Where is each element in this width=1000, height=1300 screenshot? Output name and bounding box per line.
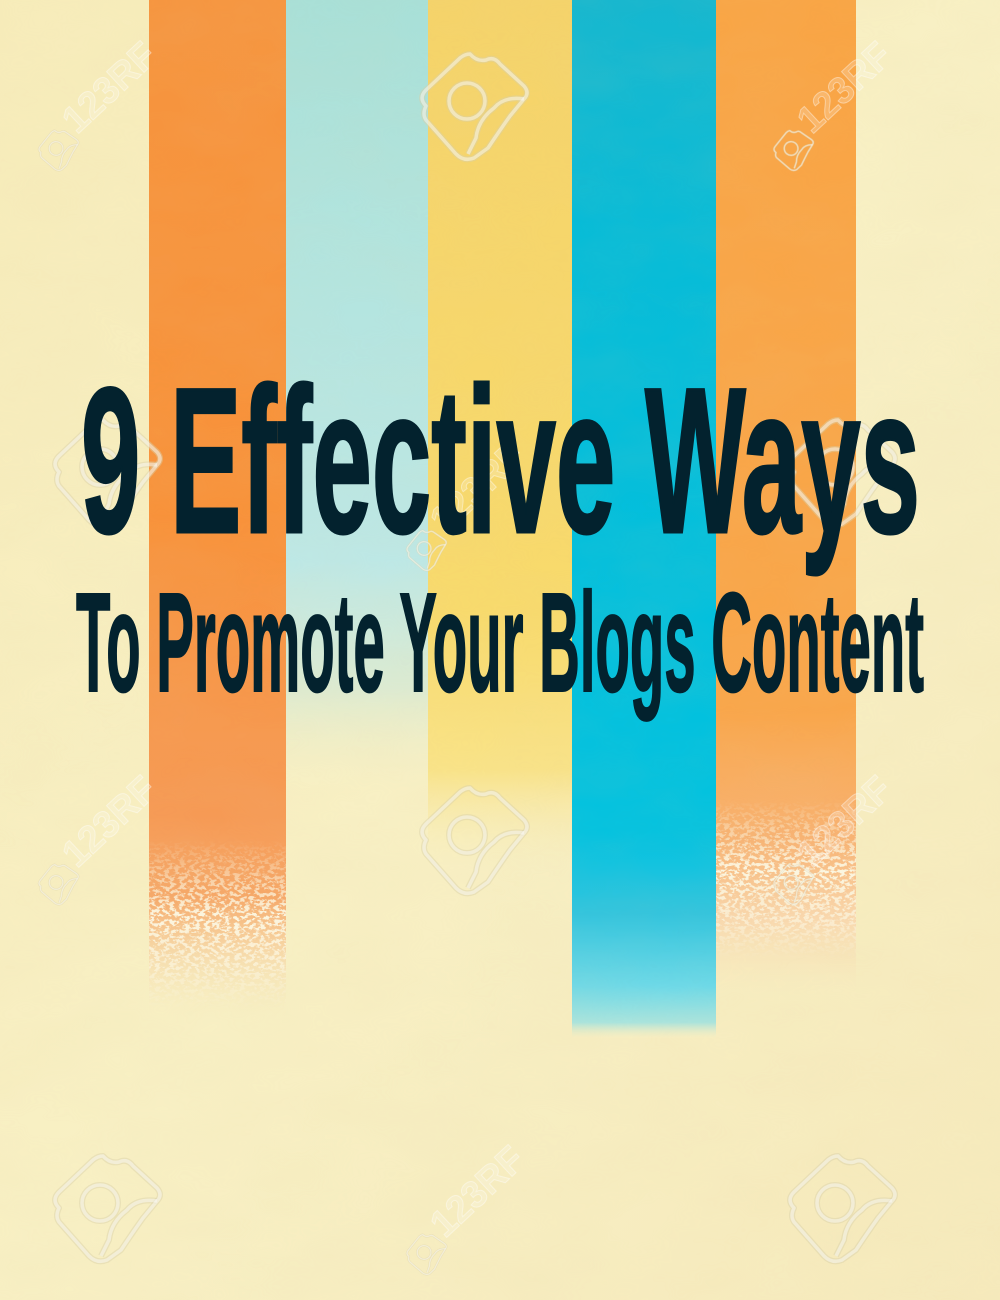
watermark: top left <box>37 34 165 173</box>
stripe: orange right <box>716 0 856 1010</box>
stripe: cyan <box>572 0 716 1038</box>
stripe: yellow <box>428 0 572 875</box>
watermark: lower left: 123RF <box>54 768 165 876</box>
speckled fade: left orange stripe <box>149 845 286 994</box>
watermark: top centre stamp <box>422 54 527 159</box>
watermark: lower left <box>37 768 165 907</box>
watermark: lower right <box>772 768 900 907</box>
stripe: orange left <box>149 0 286 1020</box>
watermark: lower right: 123RF <box>789 768 900 876</box>
watermark: top right: 123RF <box>789 34 900 142</box>
watermark: middle right stamp <box>790 420 895 525</box>
watermark: bottom centre <box>405 1138 533 1277</box>
stripe: pale aqua <box>286 0 428 800</box>
watermark: middle centre <box>405 434 533 573</box>
watermark: bottom right stamp <box>790 1156 895 1261</box>
watermark: middle left stamp <box>55 420 160 525</box>
watermark: bottom left stamp <box>55 1156 160 1261</box>
watermark: top right <box>772 34 900 173</box>
watermark: lower centre stamp <box>422 788 527 893</box>
watermark: bottom centre: 123RF <box>422 1138 533 1246</box>
watermark: top left: 123RF <box>54 34 165 142</box>
speckled fade: right orange stripe <box>716 805 856 948</box>
watermark: middle centre: 123RF <box>422 434 533 542</box>
